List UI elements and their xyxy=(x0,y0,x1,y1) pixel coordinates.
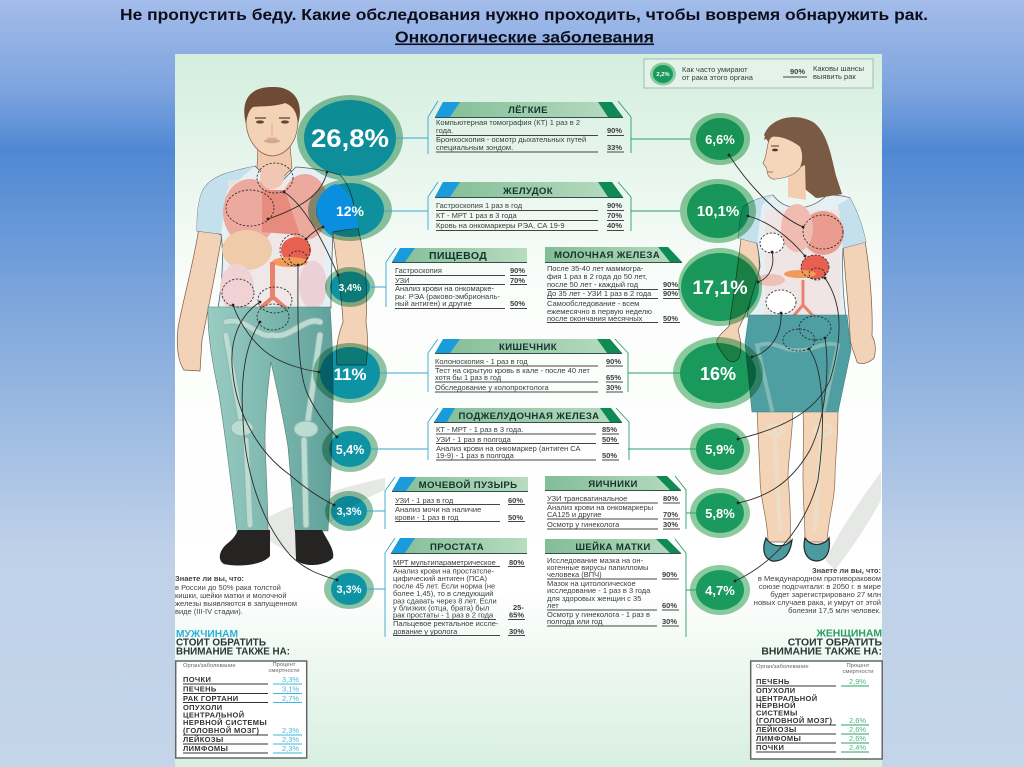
table: men: 2,3% xyxy=(282,735,299,744)
table: women: 2,6% xyxy=(849,734,866,743)
table: women: Орган/заболевание xyxy=(756,664,809,670)
panel: esophagus: 90% xyxy=(510,266,525,275)
table: men: НЕРВНОЙ СИСТЕМЫ xyxy=(183,718,267,727)
table: men: смертности xyxy=(268,668,300,674)
panel: lungs: специальным зондом. xyxy=(436,143,513,152)
panel: prostate: ПРОСТАТА xyxy=(430,542,484,553)
table: women: ПОЧКИ xyxy=(756,743,784,752)
table: women: ПЕЧЕНЬ xyxy=(756,677,790,686)
percent labels: 26,8% xyxy=(311,125,389,153)
woman face xyxy=(763,119,842,200)
panel: cervix: 60% xyxy=(662,601,677,610)
legend box: 2,2% xyxy=(656,72,670,78)
table: women: 2,6% xyxy=(849,725,866,734)
panel: cervix: полгода или год xyxy=(547,617,603,626)
panel: ovaries: Анализ крови на онкомаркеры xyxy=(547,503,653,512)
panel: breast: ежемесячно в первую неделю xyxy=(547,307,652,316)
woman shoes xyxy=(764,538,829,561)
table: women: 2,4% xyxy=(849,743,866,752)
table: women: НЕРВНОЙ xyxy=(756,701,796,710)
panel: stomach: КТ - МРТ 1 раз в 3 года xyxy=(436,211,518,220)
panel: prostate: Пальцевое ректальное иссле- xyxy=(393,619,499,628)
percent labels: 3,3% xyxy=(336,506,362,518)
panel: prostate: цифический антиген (ПСА) xyxy=(393,574,487,583)
table: men: ПЕЧЕНЬ xyxy=(183,684,217,694)
table: men xyxy=(176,661,307,758)
fact: women: в Международном противораковом xyxy=(758,574,881,583)
panel: intestine: 65% xyxy=(606,373,621,382)
panel: bladder: УЗИ - 1 раз в год xyxy=(395,496,454,505)
fact: women: союзе подсчитали: в 2050 г. в мире xyxy=(759,582,881,591)
woman arms xyxy=(717,238,875,364)
table: women: ЛЕЙКОЗЫ xyxy=(756,725,797,734)
panel: prostate: дование у уролога xyxy=(393,627,458,636)
panel: bladder: МОЧЕВОЙ ПУЗЫРЬ xyxy=(419,479,517,491)
woman legs xyxy=(757,410,838,542)
panel: prostate: рак простаты - 1 раз в 2 года xyxy=(393,610,494,620)
percent labels: 3,4% xyxy=(339,283,362,294)
panel: bladder: крови - 1 раз в год xyxy=(395,513,459,522)
panel: bladder: Анализ мочи на наличие xyxy=(395,505,481,514)
panel: cervix: 30% xyxy=(662,617,677,626)
legend box: выявить рак xyxy=(813,72,856,81)
panel: prostate: у близких (отца, брата) был xyxy=(393,604,489,612)
fact: men: железы выявляются в запущенном xyxy=(175,599,297,608)
panel: stomach: Гастроскопия 1 раз в год xyxy=(436,201,523,210)
table: women xyxy=(751,661,882,759)
percent labels: 5,9% xyxy=(705,442,735,457)
percent labels: 17,1% xyxy=(692,277,748,299)
man organs xyxy=(220,165,329,312)
panel: pancreas: 85% xyxy=(602,425,617,434)
woman shirt xyxy=(738,195,866,317)
man neck xyxy=(257,145,292,186)
panel: stomach: 40% xyxy=(607,221,622,230)
heading: men: МУЖЧИНАМ xyxy=(176,629,238,640)
panel: stomach: 90% xyxy=(607,201,622,210)
panel: pancreas: 50% xyxy=(602,435,617,444)
panel: prostate: 25- xyxy=(513,603,524,612)
panel: esophagus: 70% xyxy=(510,276,525,285)
fact: men: в России до 50% рака толстой xyxy=(175,583,281,592)
percent labels xyxy=(311,125,748,598)
table: men: ПОЧКИ xyxy=(183,675,211,684)
legend box: Как часто умирают xyxy=(682,65,748,74)
woman leg bones xyxy=(767,425,831,530)
panel: cervix: лет xyxy=(547,601,559,610)
panel: prostate: 65% xyxy=(509,610,524,620)
panel: stomach: 70% xyxy=(607,211,622,220)
connector lines: woman xyxy=(728,154,839,582)
panel: pancreas: КТ - МРТ - 1 раз в 3 года. xyxy=(436,425,523,434)
title: Не пропустить беду. Какие обследования нужно проходить, чтобы вовремя обнаружить рак. xyxy=(120,7,928,24)
man shoes xyxy=(220,530,333,565)
panel: pancreas: УЗИ - 1 раз в полгода xyxy=(436,435,512,444)
table: women: ЦЕНТРАЛЬНОЙ xyxy=(756,694,817,703)
title xyxy=(120,7,928,46)
table: men: ЦЕНТРАЛЬНОЙ xyxy=(183,710,244,720)
panel: esophagus xyxy=(386,248,527,308)
table: men: 3,3% xyxy=(282,675,299,684)
legend box xyxy=(644,59,873,88)
table: women: (ГОЛОВНОЙ МОЗГ) xyxy=(756,716,832,725)
table: men: 3,1% xyxy=(282,684,299,694)
heading: women: ЖЕНЩИНАМ xyxy=(815,628,882,640)
percent labels: 6,6% xyxy=(705,132,735,147)
panel: stomach: Кровь на онкомаркеры РЭА, СА 19-9 xyxy=(436,221,565,230)
percent labels: 10,1% xyxy=(697,203,739,220)
panel: breast: после 50 лет - каждый год xyxy=(547,280,639,289)
table: men: 2,7% xyxy=(282,694,299,703)
panel: bladder: 50% xyxy=(508,513,523,522)
floor shadows xyxy=(258,472,881,570)
panel: intestine xyxy=(428,339,628,392)
panel: ovaries: СА125 и другие xyxy=(547,510,601,519)
table: women: ЛИМФОМЫ xyxy=(756,734,801,743)
panel: intestine: 90% xyxy=(606,357,621,366)
panel: lungs: ЛЁГКИЕ xyxy=(508,105,548,116)
panel: cervix: Исследование мазка на он- xyxy=(547,556,644,565)
fact: men: Знаете ли вы, что: xyxy=(175,574,244,583)
panel: pancreas: Анализ крови на онкомаркер (антиген СА xyxy=(436,444,580,453)
man skeleton xyxy=(226,321,320,525)
panel: intestine: Колоноскопия - 1 раз в год xyxy=(435,357,528,366)
table: men: Орган/заболевание xyxy=(183,663,236,669)
man arms xyxy=(177,228,368,371)
woman hair back xyxy=(764,117,842,198)
percent labels: 16% xyxy=(700,364,736,384)
percent labels: 11% xyxy=(333,365,367,384)
legend box: Каковы шансы xyxy=(813,64,864,73)
fact: women: будет зарегистрировано 27 млн xyxy=(770,590,881,599)
panel: bladder: 60% xyxy=(508,496,523,505)
percent labels: 3,3% xyxy=(336,584,362,596)
panel: lungs: 90% xyxy=(607,126,622,135)
panel: breast: после окончания месячных xyxy=(547,314,643,323)
man head xyxy=(244,87,300,156)
table: men: 2,3% xyxy=(282,726,299,735)
panel: breast: фия 1 раз в 2 года до 50 лет, xyxy=(547,272,647,281)
panel: intestine: КИШЕЧНИК xyxy=(499,342,557,353)
table: men: 2,3% xyxy=(282,744,299,753)
panel: intestine: хотя бы 1 раз в год xyxy=(435,373,502,382)
figure: woman xyxy=(717,117,875,561)
panel: stomach xyxy=(428,182,631,231)
panel: breast: Самообследование - всем xyxy=(547,299,639,308)
panel: ovaries: 80% xyxy=(663,494,678,503)
panel: intestine: Тест на скрытую кровь в кале - после 40 лет xyxy=(435,366,590,375)
fact: women: новых случаев рака, и умрут от этой xyxy=(754,598,881,607)
percent labels: 5,8% xyxy=(705,506,735,521)
panel: breast: После 35-40 лет маммогра- xyxy=(547,264,644,273)
panel: breast: МОЛОЧНАЯ ЖЕЛЕЗА xyxy=(554,250,660,261)
panel: prostate: после 45 лет. Если норма (не xyxy=(393,582,495,590)
panel: cervix: для здоровых женщин с 35 xyxy=(547,594,641,603)
panel: stomach: ЖЕЛУДОК xyxy=(502,186,553,197)
panel: cervix: исследование - 1 раз в 3 года xyxy=(547,586,651,595)
panel: cervix: Мазок на цитологическое xyxy=(547,579,636,588)
panel: prostate: раз сдавать через 8 лет. Если xyxy=(393,596,497,606)
table: women: СИСТЕМЫ xyxy=(756,708,798,718)
heading: women: СТОИТ ОБРАТИТЬ xyxy=(788,638,883,648)
panel: esophagus: ры: РЭА (раково-эмбриональ- xyxy=(395,292,500,301)
table: men: ЛИМФОМЫ xyxy=(183,744,228,753)
woman hip bones xyxy=(757,344,838,410)
panel: cervix xyxy=(545,539,686,637)
connector lines: man xyxy=(232,171,339,581)
panel: ovaries: УЗИ трансвагинальное xyxy=(547,494,627,503)
panel: prostate: МРТ мультипараметрическое xyxy=(393,558,496,567)
title: Онкологические заболевания xyxy=(395,30,654,46)
heading: men: ВНИМАНИЕ ТАКЖЕ НА: xyxy=(176,646,290,658)
panel: pancreas: 50% xyxy=(602,451,617,460)
panel: prostate: 80% xyxy=(509,558,524,567)
panel: bladder xyxy=(385,477,528,529)
infographic panel background xyxy=(175,54,882,767)
panel: esophagus: Гастроскопия xyxy=(395,266,442,275)
woman skirt xyxy=(745,315,851,412)
table: women: Процент xyxy=(847,663,870,669)
panel: ovaries: Осмотр у гинеколога xyxy=(547,520,620,529)
heading: men: СТОИТ ОБРАТИТЬ xyxy=(176,638,266,648)
panel: intestine: 30% xyxy=(606,383,621,392)
panel: cervix: Осмотр у гинеколога - 1 раз в xyxy=(547,610,650,619)
panel: prostate xyxy=(385,538,527,637)
table: men: ЛЕЙКОЗЫ xyxy=(183,735,224,744)
panel: prostate: Анализ крови на простатспе- xyxy=(393,566,495,576)
panel: prostate: 30% xyxy=(509,627,524,636)
fact: women xyxy=(754,566,881,615)
panel: breast: 90% xyxy=(663,289,678,298)
table: women: смертности xyxy=(842,669,874,675)
panel: pancreas xyxy=(428,408,629,460)
panel: lungs: 33% xyxy=(607,143,622,152)
table: women: 2,6% xyxy=(849,716,866,725)
panel: esophagus: Анализ крови на онкомарке- xyxy=(395,284,495,293)
panel: cervix: когенные вирусы папилломы xyxy=(547,563,648,572)
panel: cervix: человека (ВПЧ) xyxy=(547,570,602,579)
panel: lungs xyxy=(428,101,631,154)
percent labels: 4,7% xyxy=(705,583,735,598)
panel: cervix: ШЕЙКА МАТКИ xyxy=(575,541,651,553)
heading: women xyxy=(761,628,883,658)
panel: prostate: более 1,45), то в следующий xyxy=(393,589,493,598)
man jeans xyxy=(208,307,333,532)
panel: pancreas: ПОДЖЕЛУДОЧНАЯ ЖЕЛЕЗА xyxy=(459,411,599,422)
panel: cervix: 90% xyxy=(662,570,677,579)
panel: breast: 50% xyxy=(663,314,678,323)
panel: ovaries: 70% xyxy=(663,510,678,519)
panel: lungs: года. xyxy=(436,126,453,135)
panel: pancreas: 19-9) - 1 раз в полгода xyxy=(436,451,515,460)
panel: breast: До 35 лет - УЗИ 1 раз в 2 года xyxy=(547,289,652,298)
panel: breast: 90% xyxy=(663,280,678,289)
table: men: (ГОЛОВНОЙ МОЗГ) xyxy=(183,726,259,735)
panel: ovaries xyxy=(545,476,686,529)
panel: breast xyxy=(545,247,682,323)
man shirt xyxy=(197,166,356,308)
fact: women: болезни 17,5 млн человек. xyxy=(788,606,881,615)
legend box: от рака этого органа xyxy=(682,73,754,82)
table: women: ОПУХОЛИ xyxy=(756,686,795,695)
panel: esophagus: 50% xyxy=(510,299,525,308)
panel: esophagus: ПИЩЕВОД xyxy=(429,250,487,262)
panel: ovaries: 30% xyxy=(663,520,678,529)
fact: men xyxy=(175,574,297,616)
dashed organ markers: man xyxy=(222,163,310,330)
fact: men: виде (III-IV стадии). xyxy=(175,607,243,616)
panel: intestine: Обследование у колопроктолога xyxy=(435,383,550,392)
fact: women: Знаете ли вы, что: xyxy=(812,566,881,575)
panel: esophagus: ный антиген) и другие xyxy=(395,299,472,308)
woman organs xyxy=(755,204,844,320)
percent labels: 12% xyxy=(336,203,365,219)
percent labels: 5,4% xyxy=(336,443,364,457)
table: women: 2,9% xyxy=(849,677,866,686)
legend box: 90% xyxy=(790,67,805,76)
table: men: ОПУХОЛИ xyxy=(183,703,222,712)
sleeve overlap in bright blue xyxy=(316,184,358,236)
panel: lungs: Бронхоскопия - осмотр дыхательных путей xyxy=(436,135,586,144)
dashed organ markers: woman xyxy=(760,215,843,351)
panel: lungs: Компьютерная томография (КТ) 1 раз в 2 xyxy=(436,118,580,127)
connector stubs to panels xyxy=(367,138,696,590)
percent circles: women xyxy=(673,113,763,615)
fact: men: кишки, шейки матки и молочной xyxy=(175,591,287,600)
heading: women: ВНИМАНИЕ ТАКЖЕ НА: xyxy=(761,646,882,658)
figure: man xyxy=(177,87,368,565)
panel: esophagus: УЗИ xyxy=(395,276,410,285)
panel: ovaries: ЯИЧНИКИ xyxy=(588,479,638,490)
table: men: РАК ГОРТАНИ xyxy=(183,694,238,703)
heading: men xyxy=(176,629,290,658)
table: men: Процент xyxy=(273,662,296,668)
percent circles: men xyxy=(297,95,403,609)
